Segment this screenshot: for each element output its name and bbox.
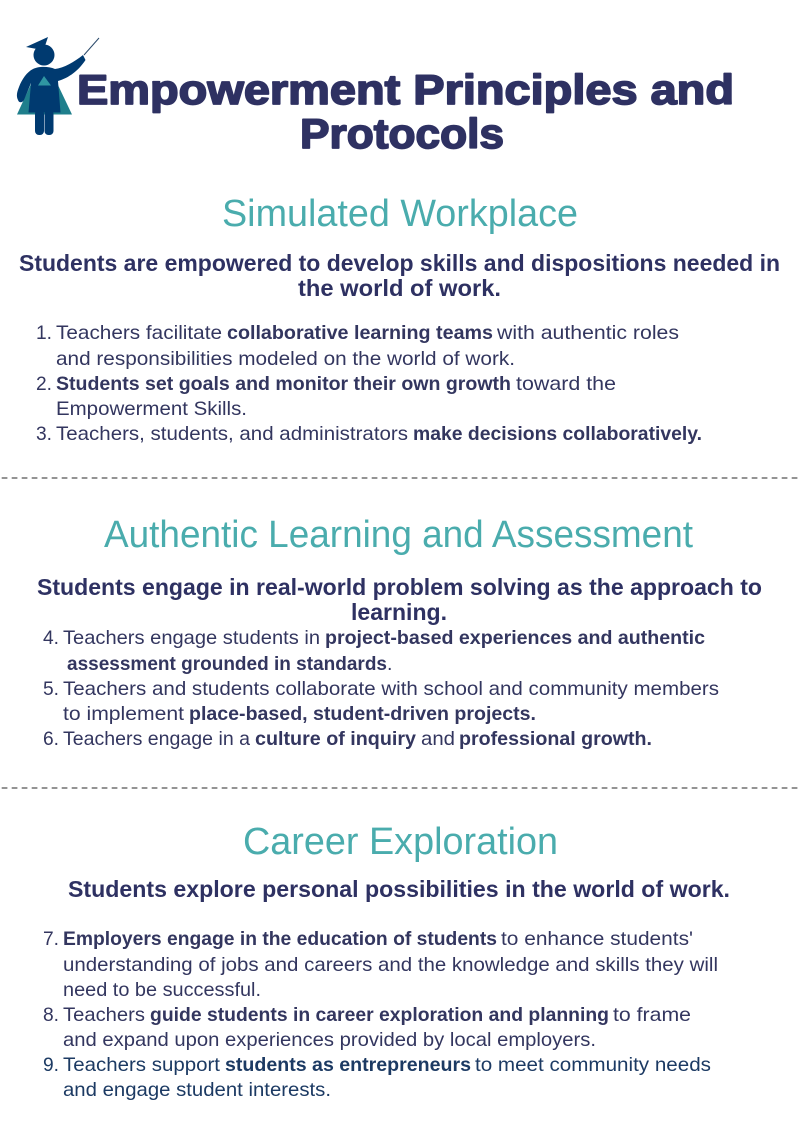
list: principles 7 to 9: to meet community needs (475, 1054, 711, 1076)
list: principles 1 to 3: 3. (36, 423, 52, 445)
list: principles 7 to 9 (43, 928, 718, 1101)
list: principles 1 to 3: and responsibilities modeled on the world of work. (56, 348, 515, 370)
subheading: authentic learning (37, 574, 762, 625)
list: principles 4 to 6: project-based experiences and authentic (325, 627, 705, 649)
heading: Career Exploration: Career Exploration (243, 821, 558, 863)
list: principles 7 to 9: and engage student interests. (63, 1079, 331, 1101)
list: principles 4 to 6: to implement (63, 703, 185, 725)
list: principles 1 to 3: make decisions collaboratively. (413, 423, 702, 445)
title: Protocols (300, 110, 504, 157)
list: principles 7 to 9: 9. (43, 1054, 59, 1076)
list: principles 7 to 9: Teachers support (63, 1054, 221, 1076)
list: principles 4 to 6: 6. (43, 728, 59, 750)
list: principles 4 to 6: professional growth. (459, 728, 652, 750)
subheading: simulated workplace: Students are empowered to develop skills and dispositions needed in (19, 250, 780, 276)
list: principles 1 to 3: with authentic roles (496, 322, 679, 344)
subheading: authentic learning: Students engage in real-world problem solving as the approach to (37, 574, 762, 600)
list: principles 1 to 3: Teachers facilitate (56, 322, 222, 344)
list: principles 7 to 9: understanding of jobs and careers and the knowledge and skills they will (63, 954, 718, 976)
list: principles 4 to 6: . (387, 653, 392, 675)
list: principles 7 to 9: to frame (613, 1004, 691, 1026)
list: principles 1 to 3: toward the (516, 373, 616, 395)
list: principles 1 to 3: 1. (36, 322, 52, 344)
subheading: authentic learning: learning. (351, 599, 447, 625)
list: principles 4 to 6: 4. (43, 627, 59, 649)
list: principles 4 to 6: Teachers engage students in (63, 627, 320, 649)
list: principles 1 to 3: Students set goals and monitor their own growth (56, 373, 511, 395)
list: principles 1 to 3 (36, 322, 702, 445)
list: principles 7 to 9: need to be successful. (63, 979, 261, 1001)
list: principles 4 to 6: Teachers and students collaborate with school and community members (63, 678, 719, 700)
list: principles 1 to 3: Empowerment Skills. (56, 398, 247, 420)
list: principles 4 to 6: assessment grounded in standards (67, 653, 387, 675)
list: principles 4 to 6 (43, 627, 719, 750)
list: principles 7 to 9: to enhance students' (501, 928, 693, 950)
list: principles 1 to 3: 2. (36, 373, 52, 395)
subheading: simulated workplace (19, 250, 780, 301)
subheading: simulated workplace: the world of work. (298, 275, 501, 301)
list: principles 4 to 6: Teachers engage in a (63, 728, 250, 750)
list: principles 7 to 9: 7. (43, 928, 59, 950)
heading: Simulated Workplace: Simulated Workplace (222, 193, 578, 235)
list: principles 1 to 3: collaborative learning teams (227, 322, 493, 344)
title: Empowerment Principles and (77, 66, 734, 113)
list: principles 7 to 9: and expand upon experiences provided by local employers. (63, 1029, 596, 1051)
list: principles 1 to 3: Teachers, students, and administrators (56, 423, 408, 445)
list: principles 4 to 6: place-based, student-driven projects. (189, 703, 536, 725)
list: principles 4 to 6: culture of inquiry (255, 728, 416, 750)
list: principles 7 to 9: guide students in career exploration and planning (150, 1004, 609, 1026)
heading: Authentic Learning and Assessment: Authentic Learning and Assessment (104, 514, 693, 556)
list: principles 7 to 9: Teachers (63, 1004, 145, 1026)
list: principles 7 to 9: 8. (43, 1004, 59, 1026)
title (77, 66, 734, 157)
list: principles 7 to 9: students as entrepreneurs (225, 1054, 471, 1076)
list: principles 4 to 6: 5. (43, 678, 59, 700)
icon: teacher with cape and pointer (17, 37, 99, 135)
list: principles 4 to 6: and (421, 728, 455, 750)
subheading: career exploration: Students explore personal possibilities in the world of work. (68, 876, 730, 902)
list: principles 7 to 9: Employers engage in the education of students (63, 928, 497, 950)
